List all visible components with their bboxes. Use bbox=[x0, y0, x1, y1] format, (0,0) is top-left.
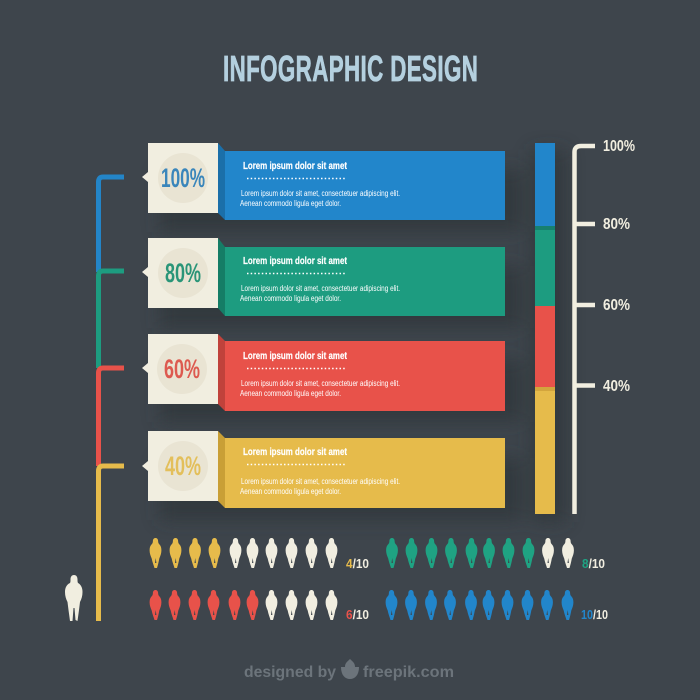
percentage: 80% bbox=[165, 258, 201, 288]
body text: Lorem ipsum dolor sit amet, consectetuer adipiscing elit. bbox=[241, 284, 400, 293]
watermark: freepik.com bbox=[363, 664, 454, 681]
scale label: 80%: 80% bbox=[603, 216, 630, 233]
ribbon bbox=[225, 438, 505, 508]
fold bbox=[218, 238, 225, 316]
scale label: 100%: 100% bbox=[603, 138, 635, 155]
dots bbox=[247, 464, 345, 466]
left connector lines bbox=[98, 177, 124, 621]
fraction: 8/10 bbox=[582, 556, 605, 571]
scale axis bbox=[574, 146, 595, 514]
connector: green bbox=[98, 271, 124, 368]
card bbox=[148, 431, 218, 501]
card bbox=[148, 143, 218, 213]
body text: Lorem ipsum dolor sit amet, consectetuer adipiscing elit. bbox=[241, 379, 400, 388]
panel: 100% bbox=[142, 143, 505, 220]
percentage: 60% bbox=[164, 354, 200, 384]
pointer bbox=[142, 267, 148, 277]
ribbon bbox=[225, 341, 505, 411]
card bbox=[148, 238, 218, 308]
body text: Aenean commodo ligula eget dolor. bbox=[240, 199, 341, 208]
circle bbox=[158, 153, 208, 203]
circle bbox=[158, 441, 208, 491]
dots bbox=[247, 368, 345, 370]
body text: Aenean commodo ligula eget dolor. bbox=[240, 389, 341, 398]
connector: blue bbox=[98, 177, 124, 272]
percentage: 100% bbox=[161, 163, 205, 193]
ribbon bbox=[225, 247, 505, 316]
pointer bbox=[142, 461, 148, 471]
watermark: designed by bbox=[244, 664, 336, 681]
scale label: 40%: 40% bbox=[603, 378, 630, 395]
circle bbox=[157, 344, 207, 394]
pictogram row: 10/10 bbox=[386, 590, 608, 622]
scale label: 60%: 60% bbox=[603, 297, 630, 314]
connector: red bbox=[98, 368, 124, 466]
body text: Lorem ipsum dolor sit amet, consectetuer adipiscing elit. bbox=[241, 189, 400, 198]
soft shadows bbox=[160, 150, 566, 522]
dots bbox=[247, 178, 345, 180]
panel: 80% bbox=[142, 238, 505, 316]
fold bbox=[218, 431, 225, 508]
stacked bar bbox=[535, 143, 555, 514]
pictogram row: 8/10 bbox=[386, 538, 605, 571]
circle bbox=[158, 248, 208, 298]
fraction: 6/10 bbox=[346, 607, 369, 622]
body text: Aenean commodo ligula eget dolor. bbox=[240, 487, 341, 496]
heading: Lorem ipsum dolor sit amet bbox=[243, 161, 348, 172]
ribbon bbox=[225, 151, 505, 220]
heading: Lorem ipsum dolor sit amet bbox=[243, 351, 348, 362]
body text: Lorem ipsum dolor sit amet, consectetuer adipiscing elit. bbox=[241, 477, 400, 486]
watermark bbox=[244, 659, 454, 681]
fraction: 10/10 bbox=[581, 607, 608, 622]
connector: yellow bbox=[98, 466, 124, 621]
heading: Lorem ipsum dolor sit amet bbox=[243, 256, 348, 267]
dots bbox=[247, 272, 345, 274]
fold bbox=[218, 143, 225, 220]
icon: large person bbox=[65, 575, 82, 621]
pictogram row: 4/10 bbox=[150, 538, 369, 571]
pointer bbox=[142, 172, 148, 182]
pointer bbox=[142, 363, 148, 373]
title: INFOGRAPHIC DESIGN bbox=[223, 50, 478, 89]
fold bbox=[218, 334, 225, 411]
fraction: 4/10 bbox=[346, 556, 369, 571]
panel: 40% bbox=[142, 431, 505, 508]
percentage: 40% bbox=[165, 451, 201, 481]
panel: 60% bbox=[142, 334, 505, 411]
body text: Aenean commodo ligula eget dolor. bbox=[240, 294, 341, 303]
heading: Lorem ipsum dolor sit amet bbox=[243, 447, 348, 458]
pictogram row: 6/10 bbox=[150, 590, 369, 622]
card bbox=[148, 334, 218, 404]
icon: freepik logo bbox=[341, 659, 359, 679]
